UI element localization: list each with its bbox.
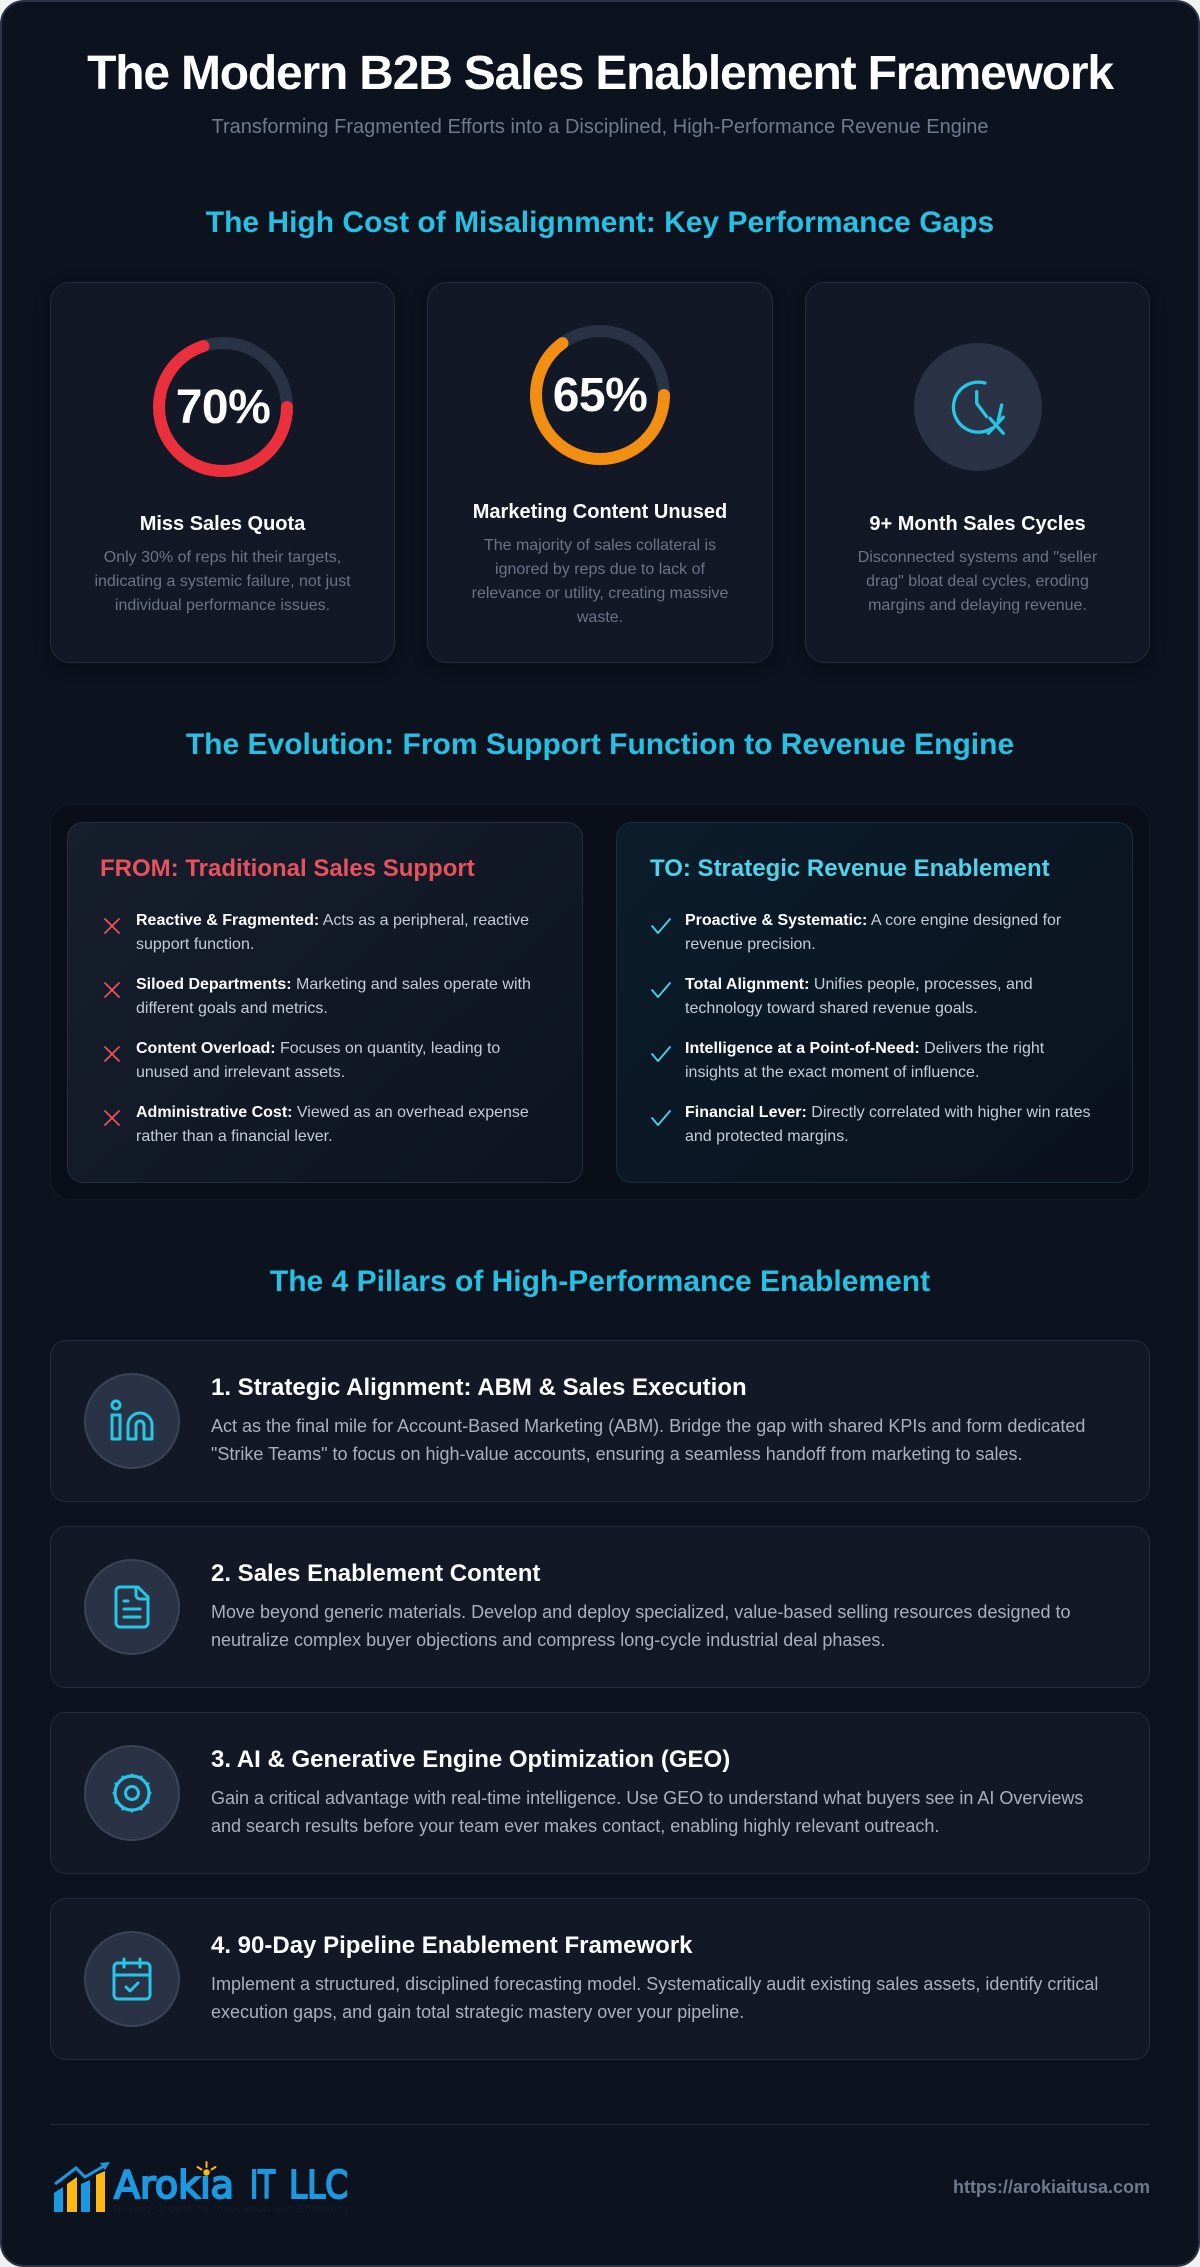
panel heading: FROM: Traditional Sales Support [100,855,475,882]
pillar text: execution gaps, and gain total strategic mastery over your pipeline. [211,2002,744,2022]
list item [685,1104,1090,1145]
icon: linkedin [84,1373,180,1469]
list item: and protected margins. [685,1128,849,1145]
logo: Arokia IT LLC: IT [250,2163,276,2207]
panel: marketing content unused [427,282,773,663]
logo: Arokia IT LLC [54,2161,350,2215]
pillar text: and search results before your team ever makes contact, enabling highly relevant outreach. [211,1816,939,1836]
pillar text: Move beyond generic materials. Develop and deploy specialized, value-based selling resources designed to [211,1602,1071,1622]
icon: clock with x [914,343,1042,471]
heading: four pillars: The 4 Pillars of High-Performance Enablement [270,1265,930,1298]
pillar title: 4. 90-Day Pipeline Enablement Framework [211,1932,693,1959]
panel: miss sales quota [50,282,395,663]
card text: ignored by reps due to lack of [495,561,705,578]
chart: 70 percent donut [153,337,293,477]
list item: revenue precision. [685,936,816,953]
card text: margins and delaying revenue. [868,597,1087,614]
list item: different goals and metrics. [136,1000,328,1017]
card title: Marketing Content Unused [473,501,727,523]
panel: pillar 3 [50,1712,1150,1874]
subtitle: Transforming Fragmented Efforts into a Disciplined, High-Performance Revenue Engine [211,116,989,138]
x list icons [104,918,120,1126]
list item: insights at the exact moment of influence. [685,1064,979,1081]
title: The Modern B2B Sales Enablement Framework [87,47,1113,100]
panel: evolution comparison [50,804,1150,1200]
list item: Reactive & Fragmented: Acts as a peripheral, reactive [136,912,529,929]
card text: indicating a systemic failure, not just [94,573,351,590]
chart: 65 percent donut [530,325,670,465]
list item: Financial Lever: Directly correlated with higher win rates [685,1104,1090,1121]
list item [685,976,1033,1017]
pillar text: Gain a critical advantage with real-time intelligence. Use GEO to understand what buyers see in AI Overviews [211,1788,1083,1808]
list item: rather than a financial lever. [136,1128,333,1145]
card title: 9+ Month Sales Cycles [869,513,1086,535]
icon: document [84,1559,180,1655]
card text: waste. [577,609,623,626]
panel: pillar 4 [50,1898,1150,2060]
heading: evolution: The Evolution: From Support Function to Revenue Engine [186,728,1014,761]
footer url: https://arokiaitusa.com [953,2177,1150,2197]
list item: technology toward shared revenue goals. [685,1000,978,1017]
logo: Arokia IT LLC: Arokia [114,2163,234,2207]
list item [136,976,531,1017]
list item [136,1040,500,1081]
card text: The majority of sales collateral is [484,537,716,554]
card text [472,537,728,626]
chart: 70 percent donut: 70% [176,381,270,434]
card text: relevance or utility, creating massive [472,585,728,602]
list item: Administrative Cost: Viewed as an overhead expense [136,1104,529,1121]
panel: to strategic revenue enablement [616,822,1133,1183]
pillar text: Act as the final mile for Account-Based Marketing (ABM). Bridge the gap with shared KPIs and form dedicated [211,1416,1085,1436]
list item: support function. [136,936,254,953]
check list icons [651,918,671,1126]
pillar title: 1. Strategic Alignment: ABM & Sales Execution [211,1374,747,1401]
panel: pillar 1 [50,1340,1150,1502]
heading: performance gaps: The High Cost of Misalignment: Key Performance Gaps [206,206,994,239]
card title: Miss Sales Quota [140,513,305,535]
pillar text [211,1788,1083,1836]
chart: 65 percent donut: 65% [553,369,647,422]
icon: gear [84,1745,180,1841]
panel: from traditional sales support [67,822,583,1183]
pillar text: Implement a structured, disciplined forecasting model. Systematically audit existing sales assets, identify critical [211,1974,1098,1994]
card text [858,549,1098,614]
list item: Total Alignment: Unifies people, processes, and [685,976,1033,993]
card text: drag" bloat deal cycles, eroding [866,573,1089,590]
pillar text [211,1974,1098,2022]
list item [136,912,529,953]
list item [685,912,1061,953]
card text: Only 30% of reps hit their targets, [104,549,341,566]
pillar text [211,1602,1071,1650]
panel: pillar 2 [50,1526,1150,1688]
panel: long sales cycles [805,282,1150,663]
icon: calendar check [84,1931,180,2027]
card text [94,549,351,614]
list item [136,1104,529,1145]
pillar title: 2. Sales Enablement Content [211,1560,540,1587]
panel heading: TO: Strategic Revenue Enablement [650,855,1050,882]
card text: individual performance issues. [115,597,330,614]
pillar text [211,1416,1085,1464]
list item: Proactive & Systematic: A core engine designed for [685,912,1061,929]
pillar text: neutralize complex buyer objections and compress long-cycle industrial deal phases. [211,1630,885,1650]
pillar text: "Strike Teams" to focus on high-value accounts, ensuring a seamless handoff from marketing to sales. [211,1444,1023,1464]
list item: Siloed Departments: Marketing and sales operate with [136,976,531,993]
list item: unused and irrelevant assets. [136,1064,345,1081]
logo: Arokia IT LLC: Driving Growth by Innovation and Efficiency [113,2203,350,2215]
card text: Disconnected systems and "seller [858,549,1097,566]
list item: Intelligence at a Point-of-Need: Delivers the right [685,1040,1044,1057]
logo: Arokia IT LLC: LLC [289,2163,348,2207]
list item [685,1040,1044,1081]
list item: Content Overload: Focuses on quantity, leading to [136,1040,500,1057]
pillar title: 3. AI & Generative Engine Optimization (GEO) [211,1746,730,1773]
